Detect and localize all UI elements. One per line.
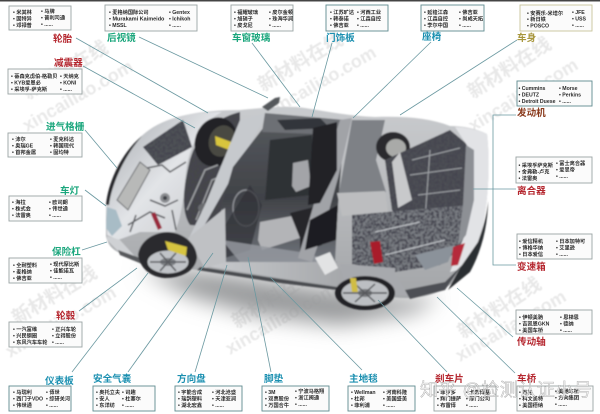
panel: steering wheel: • 天津亚润 <box>212 394 236 402</box>
watermarks <box>2 28 581 365</box>
heading: gearbox: 变速箱 <box>517 261 546 273</box>
panel: rear mirror: • Gentex <box>169 10 190 16</box>
pipes <box>128 162 186 232</box>
panel: seats: • 江森自控 <box>424 14 449 22</box>
panel: bumper: • 全耐塑料 <box>13 261 38 269</box>
panel: tyres: • 普利司通 <box>41 14 66 22</box>
far wheel <box>188 111 244 173</box>
front wheel <box>138 232 197 278</box>
heading: window glass: 车窗玻璃 <box>232 32 271 44</box>
panel: lamps: • 法雷奥 <box>12 211 32 219</box>
panel: body <box>520 5 592 31</box>
panel: axles: • 科文美特 <box>519 394 544 402</box>
steering wheel <box>233 190 259 226</box>
heading: axles: 车桥 <box>517 373 537 385</box>
panel: foot mats: • ...... <box>295 402 307 408</box>
rear cargo window <box>338 120 386 198</box>
panel: lamps: • 欧司朗 <box>49 198 68 206</box>
panel: axles: • 方向集团 <box>555 394 579 402</box>
panel: engine: • Perkins <box>559 92 581 98</box>
heading: tyres: 轮胎 <box>53 33 73 45</box>
panel: inlet grille: • 奥瑞GE <box>12 142 34 150</box>
panel: engine <box>517 81 592 106</box>
red tail light <box>451 243 465 266</box>
heading: driveshaft: 传动轴 <box>517 336 546 348</box>
panel: airbags: • 东洋纺 <box>96 401 115 409</box>
panel: shock absorbers: • 蒂森克虏伯-格勒贝 <box>11 72 58 80</box>
panel: airbags: • 司趣 <box>122 388 136 396</box>
panel: foot mats: • 万国合牛 <box>265 401 289 409</box>
panel: driveshaft: • 伊顿美驰 <box>519 313 544 321</box>
panel: brake pads: • 摩门公司 <box>466 394 490 402</box>
panel: steering wheel: • 河北沧盛 <box>212 388 236 396</box>
panel: main carpet: • Wellman <box>351 390 376 396</box>
panel: gearbox: • 爱信精机 <box>519 237 544 245</box>
car illustration <box>106 97 489 310</box>
panel: driveshaft: • ...... <box>560 328 572 334</box>
heading: door trim: 门饰板 <box>326 32 355 44</box>
heading: foot mats: 脚垫 <box>264 373 284 385</box>
watermarks: xincailiao.com <box>262 42 379 121</box>
panel: bumper: • 麦格纳 <box>13 268 32 276</box>
rear quarter <box>340 264 410 296</box>
panel: instrument panel: • 马瑞利 <box>13 388 32 396</box>
panel: door trim: • 江苏旷达 <box>330 8 355 16</box>
panel: lamps: • 伟世通 <box>49 204 69 212</box>
panel: tyres: • 固特异 <box>13 14 32 22</box>
rear seat back dark <box>308 122 337 205</box>
top edge strip <box>0 0 600 2</box>
panel: window glass: • 皮尔金顿 <box>269 8 294 16</box>
dashboard <box>225 185 262 258</box>
panel: engine: • Detroit Duese <box>518 99 556 105</box>
heading: lamps: 车灯 <box>60 185 80 197</box>
panel: gearbox: • 日本爱信 <box>519 250 543 258</box>
watermarks: xincailiao.com <box>2 282 119 361</box>
panel: shock absorbers: • ...... <box>60 87 72 93</box>
panel: inlet grille: • 首邦金属 <box>12 148 36 156</box>
panel: inlet grille: • 沛尔 <box>12 135 26 143</box>
panel: lamps: • 株式会 <box>12 204 32 212</box>
lower engine and exhaust <box>352 205 470 272</box>
heading: clutch: 离合器 <box>517 185 546 197</box>
heading: main carpet: 主地毯 <box>349 373 378 385</box>
near seat cushion <box>258 216 300 250</box>
panel: inlet grille: • 麦克科达 <box>50 135 75 143</box>
ground shadow <box>140 268 440 325</box>
panel: main carpet: • 杜邦 <box>351 394 365 402</box>
turbo part <box>160 193 170 203</box>
panel: airbags: • 杜塞尔 <box>122 394 141 402</box>
panel: wheel hubs: • 一汽富维 <box>13 325 38 333</box>
panel: clutch: • 爱思帝 <box>556 166 575 174</box>
panel: main carpet <box>348 386 415 411</box>
panel: axles: • ...... <box>555 402 567 408</box>
panel: main carpet: • 美国盛美 <box>383 394 408 402</box>
panel: lamps <box>9 196 82 221</box>
panel: driveshaft <box>516 310 592 334</box>
heading: instrument panel: 仪表板 <box>45 375 74 387</box>
panel: door trim: • 韩泰诺 <box>330 14 350 22</box>
panel: door trim <box>326 5 388 31</box>
panel: instrument panel: • ...... <box>46 403 58 409</box>
panel: clutch: • 舍弗勒-卢克 <box>518 168 550 176</box>
panel: airbags <box>93 386 155 411</box>
red coil front <box>151 212 162 230</box>
lower body sill <box>205 262 345 286</box>
panel: steering wheel: • 宇能合成 <box>178 388 203 396</box>
panel: steering wheel <box>175 386 242 411</box>
panel: driveshaft: • 美国车桥 <box>519 326 544 334</box>
panel: clutch: • ...... <box>556 174 568 180</box>
far seat cushion <box>292 160 311 192</box>
interior <box>222 120 345 262</box>
panel: wheel hubs: • 东风汽车车轮 <box>13 338 48 346</box>
panel: driveshaft: • 吉凯恩GKN <box>519 320 550 328</box>
panel: main carpet: • 菲利浦 <box>351 401 370 409</box>
panel: gearbox <box>517 234 592 259</box>
hood glass <box>106 112 222 240</box>
panel: engine: • Cummins <box>518 86 546 92</box>
far seat back <box>265 135 312 200</box>
heading: engine: 发动机 <box>517 107 546 119</box>
car body silhouette <box>106 107 489 298</box>
panel: rear mirror: • MSSL <box>109 23 127 29</box>
panel: clutch: • 法雷奥 <box>518 174 538 182</box>
panel: driveshaft: • 恩梯恩 <box>560 313 579 321</box>
door glass strip <box>222 240 338 275</box>
panel: engine: • ...... <box>559 99 571 105</box>
panel: brake pads: • 布雷博 <box>437 401 457 409</box>
radiator <box>117 162 150 210</box>
panel: brake pads: • ...... <box>466 403 478 409</box>
heading: body: 车身 <box>517 32 537 44</box>
panel: instrument panel: • 伟世通 <box>13 401 33 409</box>
panel: body: • POSCO <box>527 24 549 30</box>
panel: shock absorbers: • KYB爱恩必 <box>11 78 42 86</box>
panel: clutch: • 富士离合器 <box>556 159 586 167</box>
heading: seats: 座椅 <box>422 31 442 43</box>
headlamp <box>106 207 122 236</box>
panel: gearbox: • ...... <box>556 252 568 258</box>
panel: main carpet: • ...... <box>383 403 395 409</box>
panel: rear mirror: • ...... <box>169 23 181 29</box>
panel: airbags: • ...... <box>122 403 134 409</box>
panel: tyres: • 马牌 <box>41 7 55 15</box>
heading: wheel hubs: 轮毂 <box>56 310 76 322</box>
panel: shock absorbers: • 天纳克 <box>60 72 80 80</box>
panel: tyres: • 米其林 <box>13 8 33 16</box>
panel: inlet grille: • 固均特 <box>50 148 70 156</box>
panel: wheel hubs: • 立得股份 <box>52 332 77 340</box>
panel: instrument panel: • 综研关河 <box>46 394 71 402</box>
panel: body: • 新日铁 <box>527 15 547 23</box>
door rear pillar <box>298 118 352 262</box>
panel: airbags: • 奥托立夫 <box>96 388 121 396</box>
panel: airbags: • 安人 <box>96 394 110 402</box>
panel: shock absorbers: • 采埃孚-萨克斯 <box>11 85 48 93</box>
panel: clutch <box>516 157 592 183</box>
watermarks: 新材料在线 <box>8 261 101 329</box>
front fender <box>188 208 226 268</box>
watermarks: xincailiao.com <box>19 56 136 135</box>
panel: axles <box>517 386 593 411</box>
panel: axles: • 美国德纳 <box>519 401 543 409</box>
panel: body: • JFE <box>572 10 585 16</box>
panel: seats <box>421 5 484 31</box>
front bumper <box>107 236 140 262</box>
panel: window glass <box>231 5 294 31</box>
panel: rear mirror: • 麦格纳国际公司 <box>109 8 149 16</box>
source watermark: 知乎 @检测认证小号 <box>420 380 592 400</box>
heading: bumper: 保险杠 <box>52 246 81 258</box>
watermarks: 新材料在线 <box>464 33 555 103</box>
panel: body: • ...... <box>572 23 584 29</box>
panel: seats: • ...... <box>459 23 471 29</box>
panel: foot mats: • 宁波马格翔 <box>295 387 324 395</box>
panel: bumper: • ...... <box>50 275 62 281</box>
panel: seats: • 佛吉亚 <box>459 8 478 16</box>
panel: engine: • Morse <box>559 86 578 92</box>
heading: inlet grille: 进气格栅 <box>46 121 85 133</box>
a pillar glass <box>188 113 267 240</box>
panel: gearbox: • 艾里逊 <box>556 244 576 252</box>
panel: body: • USS <box>572 16 586 22</box>
panel: instrument panel: • 西门子VDO <box>13 394 43 402</box>
panel: foot mats: • 浙江闽通 <box>295 394 320 402</box>
panel: window glass: • 皮戈尼 <box>234 21 253 29</box>
panel: brake pads <box>434 386 496 411</box>
panel: seats: • 尚成天拓 <box>459 14 483 22</box>
panel: foot mats <box>262 386 329 411</box>
watermarks: 新材料在线 <box>228 263 319 333</box>
panel: bumper: • 佛吉亚 <box>13 274 32 282</box>
panel: rear mirror: • Ichikoh <box>169 16 190 22</box>
panel: window glass: • 福耀玻璃 <box>234 8 258 16</box>
panel: gearbox: • 日本加特可 <box>556 237 585 245</box>
panel: gearbox: • 博格华纳 <box>519 244 543 252</box>
watermarks: xincailiao.com <box>465 54 581 135</box>
heading: steering wheel: 方向盘 <box>177 373 206 385</box>
panel: brake pads: • 菲罗多 <box>437 388 456 396</box>
panel: brake pads: • 辉门捷萨 <box>437 394 461 402</box>
panel: tyres: • 邓禄普 <box>13 21 32 29</box>
panel: window glass: • ...... <box>269 23 281 29</box>
panel: seats: • 李尔中国 <box>424 21 448 29</box>
watermarks: 新材料在线 <box>19 36 112 104</box>
panel: shock absorbers: • KONI <box>60 80 77 86</box>
far wheel arch dark <box>184 112 240 226</box>
panel: wheel hubs: • 兴民钢圈 <box>13 332 37 340</box>
door vents <box>315 252 338 275</box>
panel: axles: • 万格 <box>519 388 533 396</box>
panel: rear mirror: • Murakami Kaimeido <box>109 16 165 22</box>
rear caliper <box>350 278 358 292</box>
panel: steering wheel: • 湖北宏鑫 <box>178 401 202 409</box>
panel: door trim: • ...... <box>357 23 369 29</box>
panel: axles: • 美驰车桥 <box>555 387 580 395</box>
panel: tyres: • ...... <box>41 22 53 28</box>
panel: bumper: • 现代摩比斯 <box>50 260 80 268</box>
far brake caliper <box>215 136 234 151</box>
panel: wheel hubs: • ...... <box>52 340 64 346</box>
panel: inlet grille <box>8 133 82 157</box>
rear engine block <box>385 130 468 235</box>
panel: wheel hubs <box>9 322 82 347</box>
panel: brake pads: • 卡奔博基 <box>466 388 491 396</box>
front brake caliper <box>165 241 187 256</box>
heading: shock absorbers: 减震器 <box>54 57 83 69</box>
panel: shock absorbers <box>8 69 82 94</box>
heading: airbags: 安全气囊 <box>93 373 132 385</box>
watermarks: xincailiao.com <box>222 279 339 358</box>
watermarks: 新材料在线 <box>454 273 545 343</box>
panel: driveshaft: • 德纳 <box>560 320 574 328</box>
red rear spring <box>370 241 383 264</box>
panel: engine: • DEUTZ <box>518 92 540 98</box>
door inner <box>262 113 345 135</box>
watermarks: 新材料在线 <box>254 28 347 96</box>
near seat back <box>290 205 322 252</box>
panel: rear mirror <box>105 5 197 31</box>
panel: lamps: • 海拉 <box>12 198 26 206</box>
rear wheel <box>335 276 395 310</box>
panel: inlet grille: • 韩国现代 <box>50 142 75 150</box>
watermarks: xincailiao.com <box>452 286 569 365</box>
panel: bumper <box>9 258 82 283</box>
panel: wheel hubs: • 正兴车轮 <box>52 325 77 333</box>
panel: instrument panel <box>9 386 71 411</box>
panel: foot mats: • 3M <box>265 390 275 396</box>
panel: instrument panel: • 博世 <box>46 388 60 396</box>
side mirror <box>262 97 280 111</box>
panel: main carpet: • 河南科隆 <box>383 388 408 396</box>
panel: body: • 安赛乐-米塔尔 <box>527 9 563 17</box>
rear dark edge <box>448 200 488 290</box>
spare wheel <box>376 132 410 162</box>
panel: window glass: • 珠海华润 <box>269 14 293 22</box>
engine bay upper dark box <box>143 120 192 165</box>
panel: steering wheel: • ...... <box>212 403 224 409</box>
rear cushion bench <box>337 191 388 216</box>
panel: door trim: • 江森自控 <box>357 14 382 22</box>
rear bumper <box>405 265 462 299</box>
suspension <box>187 165 225 220</box>
panel: tyres <box>9 6 71 30</box>
tail panel <box>450 127 489 272</box>
panel: foot mats: • 双票股份 <box>265 394 290 402</box>
panel: steering wheel: • 瑞鹄塑料 <box>178 394 203 402</box>
panel: door trim: • 河西工业 <box>357 8 381 16</box>
leader lines <box>72 37 517 373</box>
panel: window glass: • 旭硝子 <box>234 14 253 22</box>
panel: bumper: • 佳能诺瓦 <box>50 266 75 274</box>
panel: door trim: • 佛吉亚 <box>330 21 349 29</box>
hood dark edge <box>106 136 142 205</box>
panel: clutch: • 采埃孚萨克斯 <box>518 161 554 169</box>
panel: seats: • 延锋江森 <box>424 8 449 16</box>
heading: brake pads: 刹车片 <box>435 373 464 385</box>
panel: lamps: • ...... <box>49 213 61 219</box>
heading: rear mirror: 后视镜 <box>107 32 136 44</box>
